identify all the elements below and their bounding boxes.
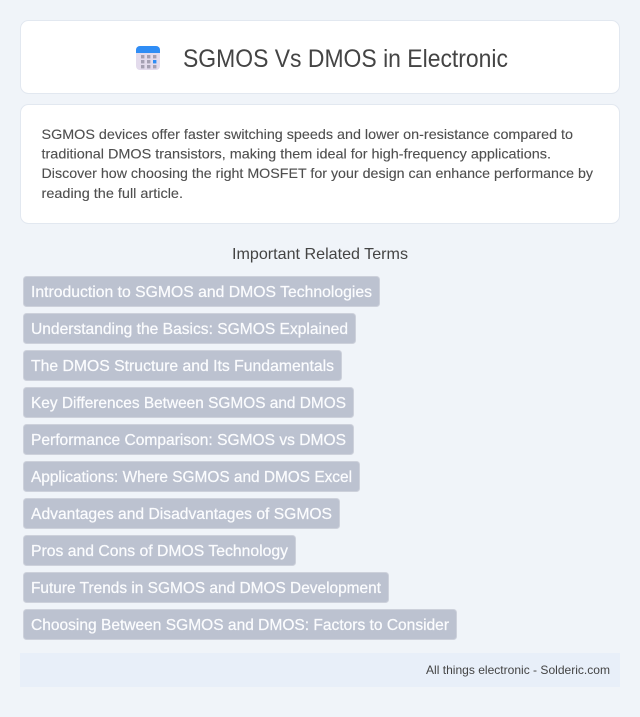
- footer: [20, 653, 620, 687]
- text block: description: reading the full article.: [42, 185, 183, 201]
- text block: description: [42, 126, 593, 201]
- chip: future trends: Future Trends in SGMOS and DMOS Development: [31, 580, 382, 597]
- chip: applications: Applications: Where SGMOS and DMOS Excel: [31, 469, 352, 486]
- text block: description: Discover how choosing the right MOSFET for your design can enhance performance by: [42, 165, 593, 181]
- text block: description: SGMOS devices offer faster switching speeds and lower on-resistance compared to: [42, 126, 573, 142]
- footer: All things electronic - Solderic.com: [426, 663, 610, 677]
- chip: applications: [24, 462, 360, 492]
- chip: DMOS structure: The DMOS Structure and Its Fundamentals: [31, 358, 334, 375]
- chip: basics: [24, 314, 356, 344]
- chip: choosing: [24, 610, 456, 640]
- chip: future trends: [24, 572, 388, 602]
- chip: pros and cons: Pros and Cons of DMOS Technology: [31, 543, 288, 560]
- chip: introduction: [24, 276, 380, 306]
- icon: calendar grid: [136, 46, 160, 70]
- chip: advantages: Advantages and Disadvantages of SGMOS: [31, 506, 332, 523]
- chip: pros and cons: [24, 536, 296, 566]
- chip: choosing: Choosing Between SGMOS and DMOS: Factors to Consider: [31, 617, 450, 634]
- list: term chips: [24, 276, 456, 640]
- panel: header: [20, 20, 620, 94]
- heading: related terms: Important Related Terms: [232, 246, 408, 263]
- text block: description: traditional DMOS transistors, making them ideal for high-frequency applications.: [42, 146, 551, 162]
- chip: introduction: Introduction to SGMOS and DMOS Technologies: [31, 284, 372, 301]
- chip: advantages: [24, 498, 340, 528]
- chip: performance: [24, 424, 354, 454]
- title: SGMOS Vs DMOS in Electronic: [183, 45, 508, 73]
- chip: performance: Performance Comparison: SGMOS vs DMOS: [31, 432, 346, 449]
- panel: intro text: [20, 104, 620, 224]
- chip: key differences: [24, 388, 354, 418]
- chip: DMOS structure: [24, 350, 342, 380]
- chip: basics: Understanding the Basics: SGMOS Explained: [31, 321, 348, 338]
- chip: key differences: Key Differences Between SGMOS and DMOS: [31, 395, 346, 412]
